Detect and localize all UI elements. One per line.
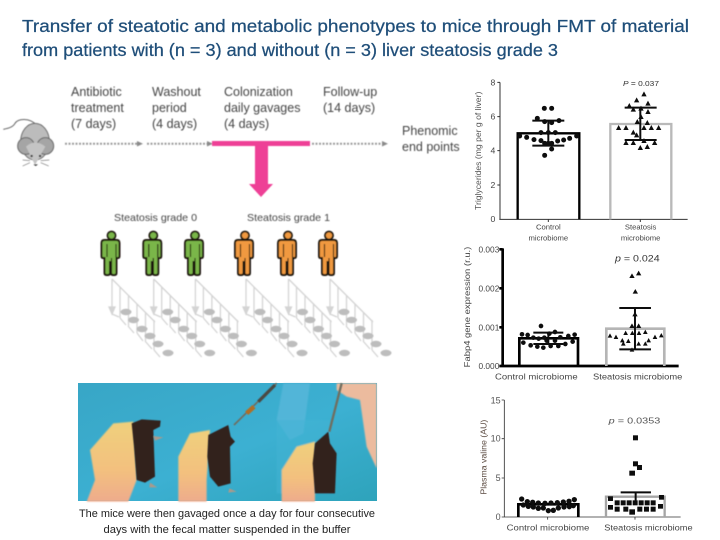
chart: Fabp4 gene expression: 0.001 (478, 322, 500, 332)
bars (518, 504, 578, 517)
timeline labels: Antibiotic (71, 85, 122, 99)
timeline labels: (4 days) (224, 117, 269, 131)
control points (517, 106, 579, 158)
panel: donors and recipient mice (102, 212, 392, 357)
category labels: Control microbiome (507, 522, 590, 532)
axes and ticks (497, 82, 688, 222)
timeline labels: Follow-up (323, 85, 377, 99)
timeline labels: (7 days) (71, 117, 116, 131)
photo: gavage of mice (78, 383, 377, 502)
chart: liver triglycerides (473, 77, 688, 242)
photo caption: The mice were then gavaged once a day for four consecutive (79, 508, 375, 520)
p value: p = 0.024 (614, 253, 660, 263)
chart: plasma valine: 15 (491, 395, 501, 405)
timeline labels: (14 days) (323, 101, 375, 115)
chart: Fabp4 gene expression (462, 245, 683, 382)
title: Transfer of steatotic and metabolic phenotypes to mice through FMT of material (22, 16, 689, 36)
timeline labels: period (152, 101, 187, 115)
pink T arrow (212, 141, 310, 197)
steatosis points (608, 435, 664, 515)
axes and ticks (499, 248, 679, 367)
timeline labels (71, 85, 460, 154)
chart: Fabp4 gene expression: 0.002 (478, 283, 500, 293)
donors without steatosis (102, 232, 203, 275)
chart: plasma valine: 0 (496, 512, 501, 522)
timeline labels: (4 days) (152, 117, 197, 131)
timeline labels: Colonization (224, 85, 293, 99)
photo caption (79, 508, 375, 536)
title (22, 16, 689, 60)
control points (520, 324, 577, 350)
photo caption: days with the fecal matter suspended in the buffer (104, 524, 351, 536)
category labels: Steatosis (625, 223, 657, 232)
y axis label: Fabp4 gene expression (r.u.) (462, 246, 472, 367)
timeline labels: treatment (71, 101, 124, 115)
bars (518, 133, 579, 219)
group labels (114, 212, 330, 224)
category labels: Control microbiome (495, 372, 578, 382)
category labels: Steatosis microbiome (604, 522, 693, 532)
donors with steatosis (235, 232, 337, 275)
chart: liver triglycerides: 0 (491, 214, 496, 224)
icon: mouse (3, 120, 54, 166)
y axis label: Triglycerides (mg per g of liver) (473, 92, 483, 210)
chart: Fabp4 gene expression: 0.000 (478, 361, 500, 371)
group labels: Steatosis grade 0 (114, 212, 197, 224)
y axis label: Plasma valine (AU) (479, 419, 489, 495)
axes and ticks (502, 400, 681, 520)
steatosis points (616, 91, 661, 150)
steatosis points (608, 271, 664, 352)
panel: experimental timeline (3, 85, 460, 197)
group labels: Steatosis grade 1 (247, 212, 330, 224)
category labels: microbiome (529, 233, 568, 242)
category labels (507, 522, 693, 532)
chart: plasma valine: 5 (496, 473, 501, 483)
chart: liver triglycerides: 2 (491, 180, 496, 190)
p value: P = 0.037 (623, 79, 659, 88)
timeline labels: Phenomic (402, 124, 458, 138)
chart: liver triglycerides: 4 (491, 146, 496, 156)
timeline labels: end points (402, 140, 460, 154)
chart: Fabp4 gene expression: 0.003 (478, 245, 500, 255)
category labels (529, 223, 660, 242)
chart: liver triglycerides: 8 (491, 77, 496, 87)
control points (519, 496, 577, 513)
dotted timeline arrows (65, 141, 388, 146)
gavage arrows to recipient mice (109, 279, 392, 357)
category labels (495, 372, 683, 382)
timeline labels: daily gavages (224, 101, 300, 115)
title: from patients with (n = 3) and without (n = 3) liver steatosis grade 3 (22, 40, 558, 60)
category labels: Control (536, 223, 561, 232)
p value: p = 0.0353 (607, 416, 661, 426)
category labels: Steatosis microbiome (593, 372, 683, 382)
chart: plasma valine (479, 395, 693, 532)
chart: liver triglycerides: 6 (491, 112, 496, 122)
category labels: microbiome (621, 233, 660, 242)
bars (519, 338, 578, 366)
timeline labels: Washout (152, 85, 201, 99)
chart: plasma valine: 10 (491, 434, 501, 444)
